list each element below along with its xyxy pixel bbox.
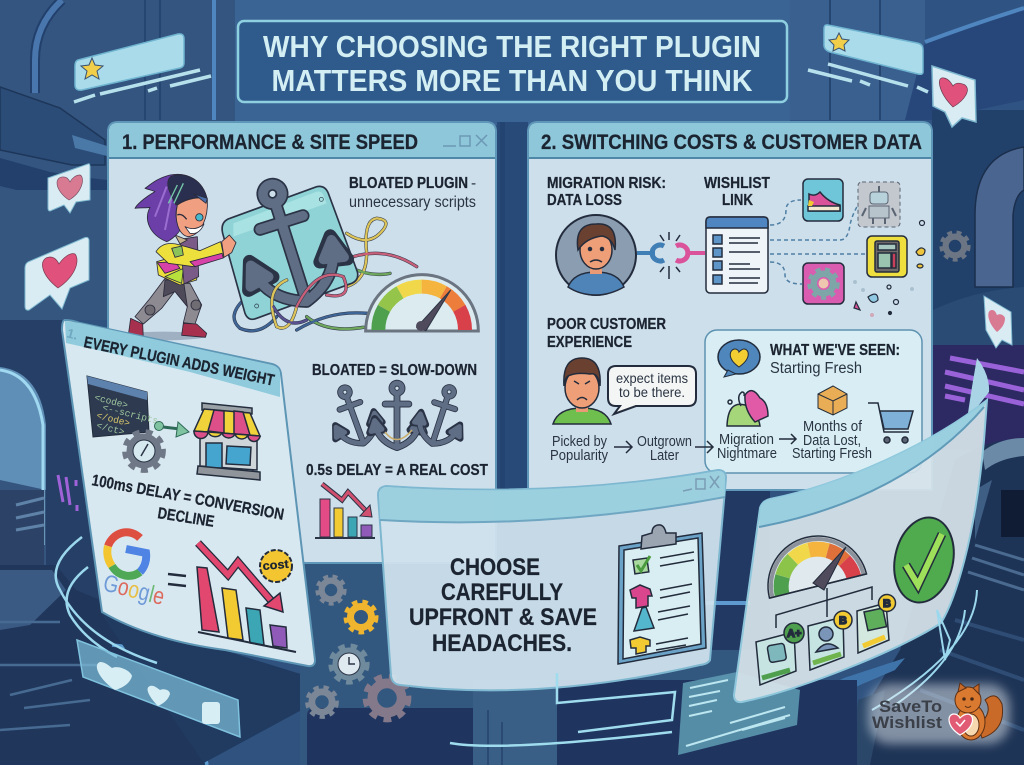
- icon: wishlist window: [706, 217, 768, 293]
- callout heading: WHAT WE'VE SEEN:: [770, 342, 900, 359]
- arrow: code to store: [154, 422, 189, 437]
- left machinery: [0, 320, 120, 765]
- panel: plugin audit screen: [734, 400, 987, 702]
- panel 2 header: [529, 123, 931, 158]
- card: A+ plugin: [756, 623, 804, 685]
- decorative gears column: [308, 578, 406, 718]
- bottom floating document and streaks: [450, 672, 800, 755]
- center: [497, 122, 528, 492]
- cables in front: [272, 275, 367, 330]
- icon: gear lower right: [368, 678, 406, 718]
- cost badge: [260, 550, 292, 582]
- chart: small declining bars: [315, 484, 375, 538]
- bloated slow-down label: BLOATED = SLOW-DOWN: [312, 362, 477, 379]
- statement text: HEADACHES.: [432, 630, 572, 657]
- equals sign: [168, 574, 186, 586]
- poor customer experience label: POOR CUSTOMER: [547, 316, 666, 333]
- real cost label: 0.5s DELAY = A REAL COST: [306, 462, 488, 479]
- cost badge: cost: [262, 557, 289, 573]
- heart bubble: left small: [48, 164, 90, 213]
- flow: months of data lost: Starting Fresh: [792, 446, 872, 462]
- glass sliver behind audit screen: [967, 358, 989, 420]
- header strip: [65, 321, 280, 397]
- icon: robot tile: [858, 182, 900, 227]
- icon: code window with gauge gear: </ct>: [95, 420, 126, 438]
- poor customer experience label: [547, 316, 666, 351]
- card: B puzzle plugin: [857, 594, 896, 653]
- card: B plugin: [808, 611, 852, 670]
- panel 1 header: [109, 123, 495, 158]
- scattered data fragments: [853, 220, 925, 317]
- title banner: [238, 21, 787, 102]
- icon: worried customer avatar: [556, 215, 636, 295]
- heart bubble: left large: [25, 237, 89, 310]
- arrow: [614, 441, 632, 453]
- card: B puzzle plugin: B: [883, 598, 891, 610]
- icon: gear tile: [803, 263, 844, 304]
- statement text: UPFRONT & SAVE: [409, 604, 597, 631]
- right lower: [830, 438, 1024, 765]
- panel 2 header: 2. SWITCHING COSTS & CUSTOMER DATA: [541, 131, 922, 154]
- flow: outgrown later: Later: [650, 448, 679, 464]
- floating star tile left: [74, 34, 211, 102]
- icon: heart speech bubble: [718, 340, 760, 377]
- flow: picked by popularity: Popularity: [550, 448, 609, 464]
- flow: picked by popularity: [550, 434, 609, 464]
- floating star tile right: [808, 25, 928, 92]
- panel: switching costs and customer data: [528, 122, 932, 490]
- icon: storefront: [194, 403, 260, 480]
- callout heading: [770, 342, 900, 377]
- conversion decline label: DECLINE: [156, 505, 216, 531]
- header strip: [759, 400, 987, 527]
- chart: conversion decline bars: [197, 543, 296, 652]
- icon: frustrated customer: [553, 358, 611, 424]
- icon: Google logo: Google: [101, 570, 167, 611]
- bloated plugin note: BLOATED PLUGIN: [349, 175, 468, 192]
- migration risk label: [547, 175, 666, 209]
- dashed connectors: [770, 200, 866, 284]
- gauge needle: [813, 547, 846, 590]
- flow: migration nightmare: Nightmare: [717, 446, 777, 462]
- panel: every plugin adds weight: [62, 320, 315, 666]
- tree connectors: [776, 587, 872, 628]
- icon: green check circle: [887, 512, 961, 608]
- poor customer experience label: EXPERIENCE: [547, 334, 632, 351]
- icon: clothes on hanger: [727, 391, 768, 426]
- panel 1 header: 1. PERFORMANCE & SITE SPEED: [122, 131, 418, 154]
- logo: Save To Wishlist: SaveTo: [879, 697, 942, 716]
- right machinery: [790, 0, 1024, 125]
- flow: picked by popularity: Picked by: [552, 434, 608, 450]
- cables behind plate: [234, 218, 417, 331]
- callout heading: Starting Fresh: [770, 360, 862, 377]
- callout: what we've seen: [705, 330, 922, 473]
- flow: outgrown later: Outgrown: [637, 434, 692, 450]
- panel: choose carefully: [378, 470, 726, 690]
- icon: code window with gauge gear: <--scripts: [101, 402, 159, 427]
- icon: cardboard box: [818, 386, 847, 415]
- wishlist link label: [704, 175, 770, 209]
- big anchor: [220, 169, 356, 317]
- arrow: [779, 434, 796, 444]
- character: [120, 174, 236, 340]
- logo: Save To Wishlist: Wishlist: [872, 713, 942, 732]
- icon: three anchors: [320, 379, 474, 452]
- icon: code window with gauge gear: [87, 376, 162, 468]
- card: B plugin: B: [839, 615, 847, 627]
- heart bubble: top right: [932, 66, 976, 127]
- icon: code window with gauge gear: <code>: [93, 392, 129, 411]
- icon: code window with gauge gear: </ode>: [95, 410, 131, 429]
- title banner: MATTERS MORE THAN YOU THINK: [272, 63, 753, 98]
- swirl lines and floating glass bottom left: [56, 537, 240, 737]
- speech bubble: expect items: expect items: [616, 370, 688, 386]
- icon: calculator tile: [867, 236, 907, 277]
- bloated plugin note: unnecessary scripts: [349, 194, 476, 211]
- statement text: [409, 554, 597, 657]
- header strip: [379, 471, 725, 522]
- wishlist link label: WISHLIST: [704, 175, 770, 192]
- flow: months of data lost: [792, 419, 872, 462]
- bloated plugin note: [349, 175, 476, 211]
- icon: shopping cart: [868, 403, 913, 443]
- header strip: EVERY PLUGIN ADDS WEIGHT: [82, 334, 276, 390]
- icon: yellow gear: [347, 603, 375, 631]
- plugin plate: [222, 186, 358, 319]
- header strip: 1.: [65, 325, 80, 343]
- icon: squirrel with heart: [949, 683, 1003, 740]
- icon: shoe tile: [803, 179, 843, 221]
- card: A+ plugin: A+: [787, 628, 801, 640]
- icon: Google logo: [101, 532, 167, 611]
- wishlist link label: LINK: [722, 192, 754, 209]
- icon: broken chain link: [637, 232, 705, 279]
- statement text: CAREFULLY: [441, 579, 563, 606]
- icon: gear right: [942, 234, 968, 258]
- icon: clipboard checklist: [618, 525, 706, 664]
- flow: migration nightmare: Migration: [719, 432, 774, 448]
- flow: months of data lost: Months of: [803, 419, 863, 435]
- speech bubble: expect items: [608, 366, 696, 414]
- character pushing plugin, with anchor, cables, gauge: [120, 169, 478, 340]
- fast gauge: [757, 525, 867, 598]
- title banner: WHY CHOOSING THE RIGHT PLUGIN: [263, 29, 761, 64]
- flow: months of data lost: Data Lost,: [803, 433, 861, 449]
- icon: clock gear: [332, 648, 366, 680]
- flow: outgrown later: [637, 434, 692, 464]
- migration risk label: MIGRATION RISK:: [547, 175, 666, 192]
- swirl lines bottom right: [872, 590, 977, 710]
- slow gauge: [366, 275, 478, 331]
- arrow: [695, 441, 713, 453]
- panel: performance and site speed: [108, 122, 496, 563]
- bloated plugin note: -: [471, 175, 476, 192]
- flow: migration nightmare: [717, 432, 777, 462]
- conversion decline label: 100ms DELAY = CONVERSION: [90, 472, 285, 524]
- icon: gear lower left: [308, 688, 336, 716]
- logo: Save To Wishlist: [868, 683, 1010, 744]
- migration risk label: DATA LOSS: [547, 192, 622, 209]
- heart bubble: right lower: [984, 296, 1012, 348]
- icon: gray gear: [318, 578, 344, 602]
- speech bubble: expect items: to be there.: [619, 384, 685, 400]
- statement text: CHOOSE: [450, 554, 540, 581]
